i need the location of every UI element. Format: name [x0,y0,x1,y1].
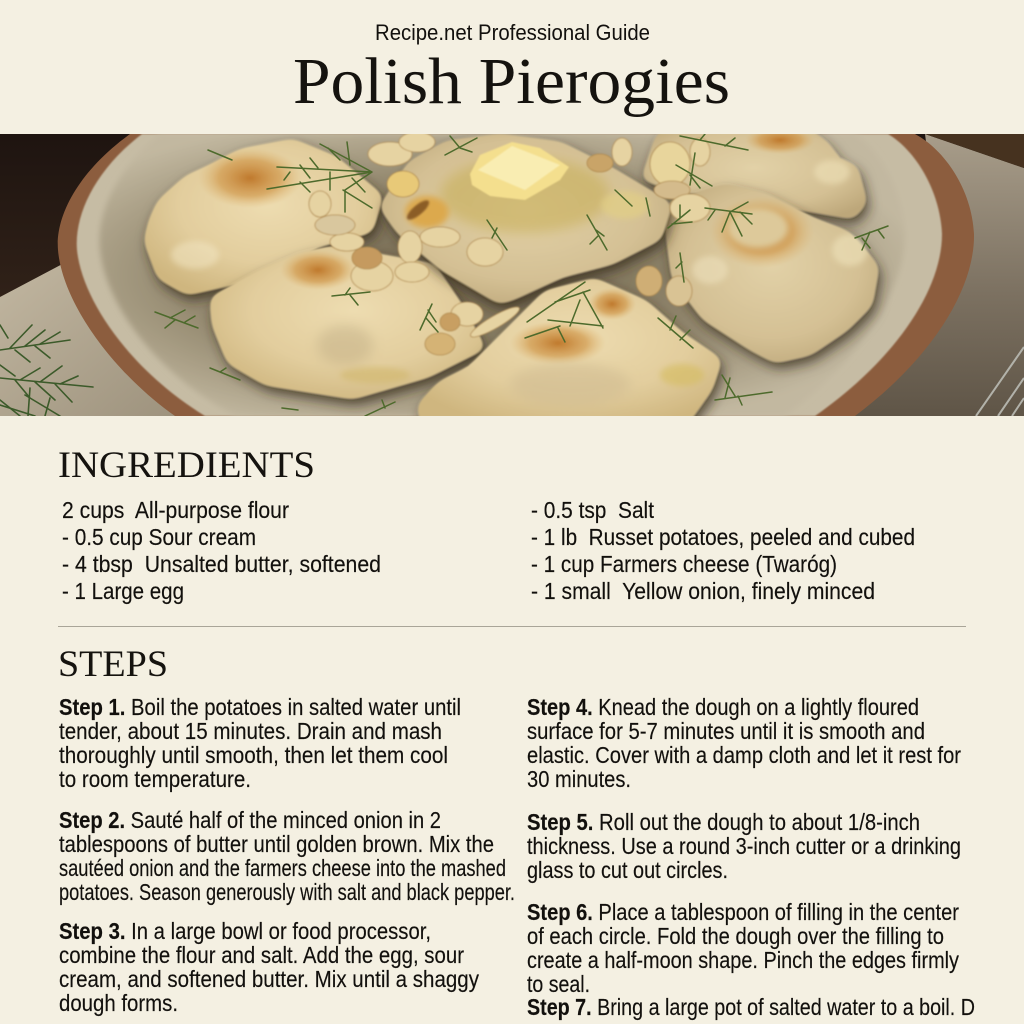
napkin left [0,265,175,416]
step 3 [59,918,479,1016]
fork [976,347,1024,416]
step 2: tablespoons of butter until golden brown. Mix the [59,831,494,857]
step 1: Step 1. Boil the potatoes in salted water until [59,694,461,720]
dumpling: right [665,183,880,364]
dumpling: top right [640,125,868,220]
step 4: surface for 5-7 minutes until it is smooth and [527,718,925,744]
step 3: cream, and softened butter. Mix until a shaggy [59,966,479,992]
step 6: of each circle. Fold the dough over the filling to [527,923,944,949]
plate [58,134,974,416]
ingredients: right column: - 1 small Yellow onion, finely minced [531,578,875,604]
ingredients: left column: - 1 Large egg [62,578,184,604]
ingredients: left column: - 4 tbsp Unsalted butter, softened [62,551,381,577]
step 6 [527,899,959,997]
ingredients: left column [62,497,381,604]
step 2: sautéed onion and the farmers cheese into the mashed [59,855,506,881]
napkin right [840,134,1024,416]
dumpling: lower center [416,277,723,425]
title: Polish Pierogies [293,45,730,118]
step 7: Step 7. Bring a large pot of salted water to a boil. D [527,994,975,1020]
step 1 [59,694,461,792]
step 4: Step 4. Knead the dough on a lightly floured [527,694,919,720]
step 3: dough forms. [59,990,178,1016]
butter pat [470,142,569,200]
step 1: tender, about 15 minutes. Drain and mash [59,718,442,744]
step 5: Step 5. Roll out the dough to about 1/8-inch [527,809,920,835]
step 5: thickness. Use a round 3-inch cutter or a drinking [527,833,961,859]
dill at left edge [0,325,93,416]
dill sprigs on food [155,134,888,416]
step 6: create a half-moon shape. Pinch the edges firmly [527,947,959,973]
wood table [0,134,1024,297]
step 2 [59,807,515,905]
ingredients: right column: - 1 lb Russet potatoes, peeled and cubed [531,524,915,550]
step 4: 30 minutes. [527,766,631,792]
step 2: Step 2. Sauté half of the minced onion in 2 [59,807,441,833]
dumpling: top center [378,133,673,305]
hero photo: plate of pierogies [0,125,1024,425]
step 6: to seal. [527,971,590,997]
step 5: glass to cut out circles. [527,857,728,883]
step 3: combine the flour and salt. Add the egg, sour [59,942,464,968]
ingredients heading: INGREDIENTS [58,445,315,486]
step 2: potatoes. Season generously with salt and black pepper. [59,879,515,905]
step 1: thoroughly until smooth, then let them cool [59,742,448,768]
step 1: to room temperature. [59,766,251,792]
ingredients: right column [531,497,915,604]
step 4 [527,694,961,792]
ingredients: right column: - 0.5 tsp Salt [531,497,655,523]
ingredients: right column: - 1 cup Farmers cheese (Twaróg) [531,551,837,577]
dumpling: lower left [209,245,487,400]
ingredients: left column: 2 cups All-purpose flour [62,497,289,523]
step 5 [527,809,961,883]
step 6: Step 6. Place a tablespoon of filling in the center [527,899,959,925]
ingredients: left column: - 0.5 cup Sour cream [62,524,256,550]
caramelized onions [309,132,710,355]
dumpling: left [143,138,384,296]
step 4: elastic. Cover with a damp cloth and let it rest for [527,742,961,768]
steps heading: STEPS [58,644,168,685]
header: source line: Recipe.net Professional Guide [375,20,650,45]
step 3: Step 3. In a large bowl or food processor, [59,918,431,944]
